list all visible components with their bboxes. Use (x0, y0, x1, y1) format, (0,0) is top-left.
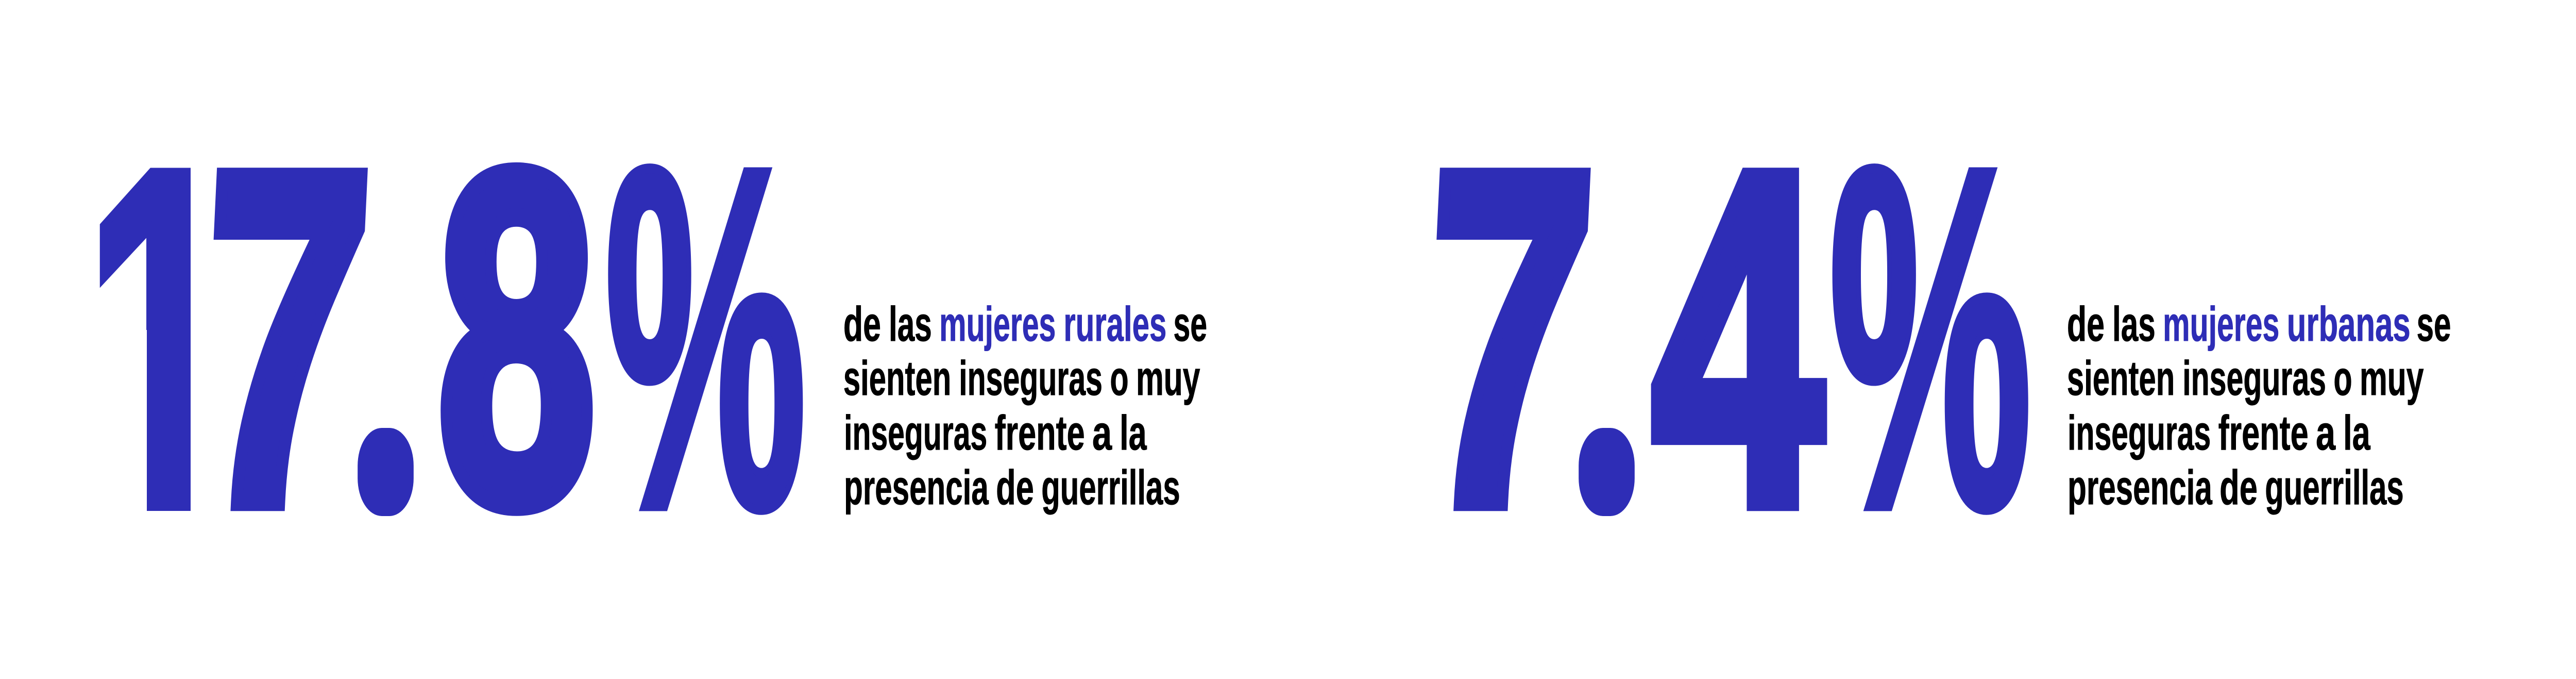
description: urban women: de (2067, 296, 2105, 351)
description: rural women: se (1174, 296, 1207, 351)
description: urban women: a (2316, 405, 2336, 460)
description: urban women: inseguras (2182, 351, 2326, 405)
big number: 17.8%: 1 (83, 68, 240, 609)
description: rural women: frente (995, 405, 1085, 460)
description: rural women: presencia (844, 460, 989, 515)
description: rural women: de (996, 460, 1034, 515)
big number: 7.4% (1413, 67, 2032, 609)
description: urban women: sienten (2067, 351, 2175, 405)
description: urban women: presencia (2067, 460, 2212, 515)
big number: 7.4%: . (1599, 403, 1614, 496)
description: rural women: muy (1136, 351, 1200, 405)
description: rural women (843, 296, 1207, 515)
description: rural women: inseguras (844, 405, 987, 460)
description: urban women: inseguras (2067, 405, 2211, 460)
description: urban women: la (2343, 405, 2370, 460)
description: urban women: las (2112, 296, 2156, 351)
description: rural women: de (843, 296, 881, 351)
description: urban women: muy (2360, 351, 2424, 405)
big number: 7.4%: 7 (1413, 75, 1602, 602)
description: urban women (2067, 296, 2451, 515)
description: urban women: urbanas (2287, 296, 2411, 351)
panel: urban women (1413, 67, 2451, 609)
description: urban women: se (2417, 296, 2451, 351)
big number: 17.8%: 8 (437, 74, 596, 602)
big number: 7.4%: % (1829, 67, 2032, 609)
big number: 17.8%: % (605, 67, 807, 609)
description: urban women: frente (2218, 405, 2309, 460)
description: rural women: inseguras (959, 351, 1103, 405)
description: urban women: o (2333, 351, 2352, 405)
big number: 7.4%: 4 (1653, 75, 1824, 602)
description: rural women: la (1120, 405, 1147, 460)
description: urban women: guerrillas (2265, 460, 2404, 515)
big number: 17.8%: 7 (190, 75, 379, 602)
description: rural women: sienten (843, 351, 951, 405)
description: urban women: mujeres (2163, 296, 2279, 351)
description: rural women: las (889, 296, 932, 351)
big number: 17.8% (100, 162, 803, 516)
big number: 17.8%: . (378, 403, 393, 496)
description: rural women: rurales (1063, 296, 1166, 351)
panel: rural women (100, 162, 1207, 516)
description: rural women: mujeres (939, 296, 1056, 351)
description: urban women: de (2219, 460, 2258, 515)
description: rural women: guerrillas (1041, 460, 1180, 515)
description: rural women: a (1092, 405, 1112, 460)
description: rural women: o (1110, 351, 1129, 405)
